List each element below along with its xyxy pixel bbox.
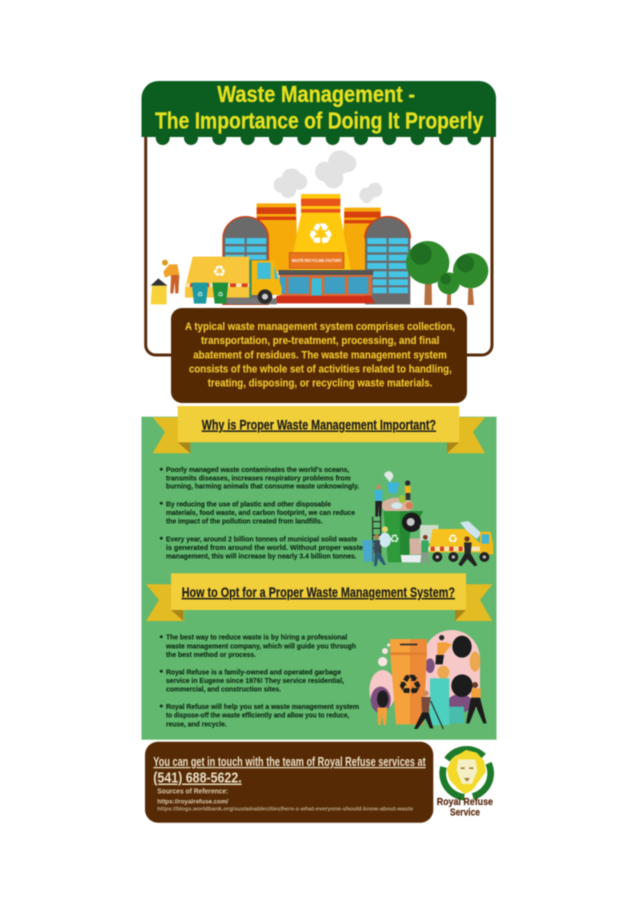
- ribbon heading: how to opt: How to Opt for a Proper Waste Management System?: [182, 584, 455, 600]
- logo text: Service: [450, 806, 480, 818]
- wheelie bins: ♻: [217, 291, 223, 299]
- phone number: (541) 688-5622.: [153, 770, 242, 786]
- ribbon heading: why important: [153, 406, 485, 453]
- person with beard, left: [377, 690, 388, 725]
- bullet 3: Every year, around 2 billion tonnes of municipal solid waste: [166, 534, 357, 543]
- teal boxes: [430, 678, 464, 725]
- bullet 2: commercial, and construction sites.: [166, 685, 281, 694]
- centre tower with recycling symbol: [289, 194, 351, 270]
- yellow truck: ♻: [448, 531, 458, 545]
- person carrying bag, right: [451, 674, 487, 723]
- illustration: recycling factory: ♻: [307, 217, 334, 252]
- side towers: [257, 203, 298, 272]
- smoke clouds: [274, 150, 382, 203]
- bullet 2: [160, 499, 355, 526]
- illustration: orange bin and cleaners: [369, 630, 487, 729]
- pink backdrop: [369, 630, 480, 718]
- person lifting bag, top: [435, 635, 472, 664]
- sources: https://blogs.worldbank.org/sustainablecities/here-s-what-everyone-should-know-about-waste: [157, 806, 413, 812]
- waste pile: [381, 471, 413, 514]
- wheelie bins: [192, 283, 228, 304]
- orange leaves: [437, 652, 480, 679]
- bullet 1: The best way to reduce waste is by hiring a professional: [166, 633, 347, 642]
- illustration: recycling factory: [151, 150, 488, 305]
- person on bin, yellow shirt: [405, 480, 411, 500]
- bullet 2: materials, food waste, and carbon footprint, we can reduce: [166, 508, 355, 517]
- bullet 2: Royal Refuse is a family-owned and operated garbage: [166, 667, 341, 676]
- bullet list: how to opt: [160, 633, 359, 728]
- brown frame: [146, 135, 492, 355]
- green awning header: [142, 81, 496, 145]
- intro text panel: treating, disposing, or recycling waste materials.: [208, 378, 432, 390]
- title: The Importance of Doing It Properly: [155, 108, 483, 134]
- intro text panel: abatement of residues. The waste management system: [193, 349, 447, 361]
- wheelie bins: ♻: [197, 291, 203, 299]
- worker with bin: [151, 260, 179, 304]
- running man: [458, 536, 477, 566]
- title: Waste Management -: [217, 81, 415, 107]
- bullet 1: [160, 465, 359, 491]
- windows: [225, 238, 408, 293]
- logo text: Royal Refuse: [437, 796, 493, 808]
- bullet 3: [160, 534, 363, 561]
- bullet list: why important: [160, 465, 363, 561]
- recycling ring: [433, 740, 500, 807]
- title: [155, 81, 483, 134]
- bullet 3: to dispose-off the waste efficiently and allow you to reduce,: [166, 711, 349, 720]
- bullet 3: [160, 702, 359, 728]
- bullet 3: is generated from around the world. Without proper waste: [166, 543, 363, 552]
- bullet 1: transmits diseases, increases respiratory problems from: [166, 473, 351, 482]
- person with backpack: [374, 534, 386, 566]
- right building: [365, 217, 410, 304]
- illustration: bin, people and truck: [362, 471, 493, 566]
- bullet 1: [160, 633, 356, 659]
- intro text panel: transportation, pre-treatment, processing, and final: [201, 335, 439, 347]
- factory sign: [289, 253, 344, 268]
- sources: [157, 788, 413, 812]
- top section: header and factory: [142, 81, 496, 355]
- bullet 1: Poorly managed waste contaminates the world's oceans,: [166, 465, 349, 474]
- rubbish bags: [362, 525, 438, 562]
- green bin: ♻: [389, 531, 399, 545]
- garbage truck: ♻: [212, 263, 226, 281]
- green content panel: [142, 417, 496, 740]
- orange bin with recycling symbol: ♻: [397, 668, 423, 701]
- intro text panel: [171, 308, 467, 403]
- bullet 3: reuse, and recycle.: [166, 719, 227, 728]
- black tyre: [402, 513, 421, 532]
- person on bin, blue shirt: [374, 485, 383, 517]
- intro text panel: consists of the whole set of activities related to handling,: [189, 364, 452, 376]
- sources: Sources of Reference:: [157, 788, 228, 796]
- bullet 2: the impact of the pollution created from landfills.: [166, 517, 323, 526]
- bullet 3: management, this will increase by nearly 3.4 billion tonnes.: [166, 552, 357, 561]
- bullet 2: By reducing the use of plastic and other disposable: [166, 499, 331, 508]
- purple leaves: [371, 658, 473, 713]
- logo text: [437, 796, 493, 818]
- person in green: [420, 535, 429, 564]
- contact line: You can get in touch with the team of Royal Refuse services at: [153, 755, 426, 769]
- ribbon heading: why important: Why is Proper Waste Management Important?: [202, 418, 436, 432]
- ground: [227, 298, 277, 304]
- bullet 1: burning, harming animals that consume waste unknowingly.: [166, 482, 359, 491]
- ladder: [373, 517, 381, 562]
- bullet 1: waste management company, which will guide you through: [165, 641, 356, 650]
- logo: Royal Refuse Service: [433, 740, 500, 818]
- sources: https://royalrefuse.com/: [157, 798, 228, 806]
- bullet 3: Royal Refuse will help you set a waste management system: [166, 702, 359, 711]
- left building: [223, 217, 268, 304]
- bullet 1: the best method or process.: [166, 650, 256, 659]
- ribbon heading: how to opt: [146, 573, 492, 621]
- garbage truck: [185, 257, 282, 304]
- lion: [447, 750, 486, 794]
- bullet 2: [160, 667, 344, 694]
- intro text panel: A typical waste management system comprises collection,: [185, 321, 455, 333]
- trees: [406, 241, 488, 305]
- bullet 2: service in Eugene since 1976! They service residential,: [166, 676, 344, 685]
- person with broom: [414, 691, 443, 729]
- low factory block: [278, 270, 373, 275]
- contact panel: [145, 742, 433, 823]
- factory sign: WASTE RECYCLING FACTORY: [292, 258, 342, 263]
